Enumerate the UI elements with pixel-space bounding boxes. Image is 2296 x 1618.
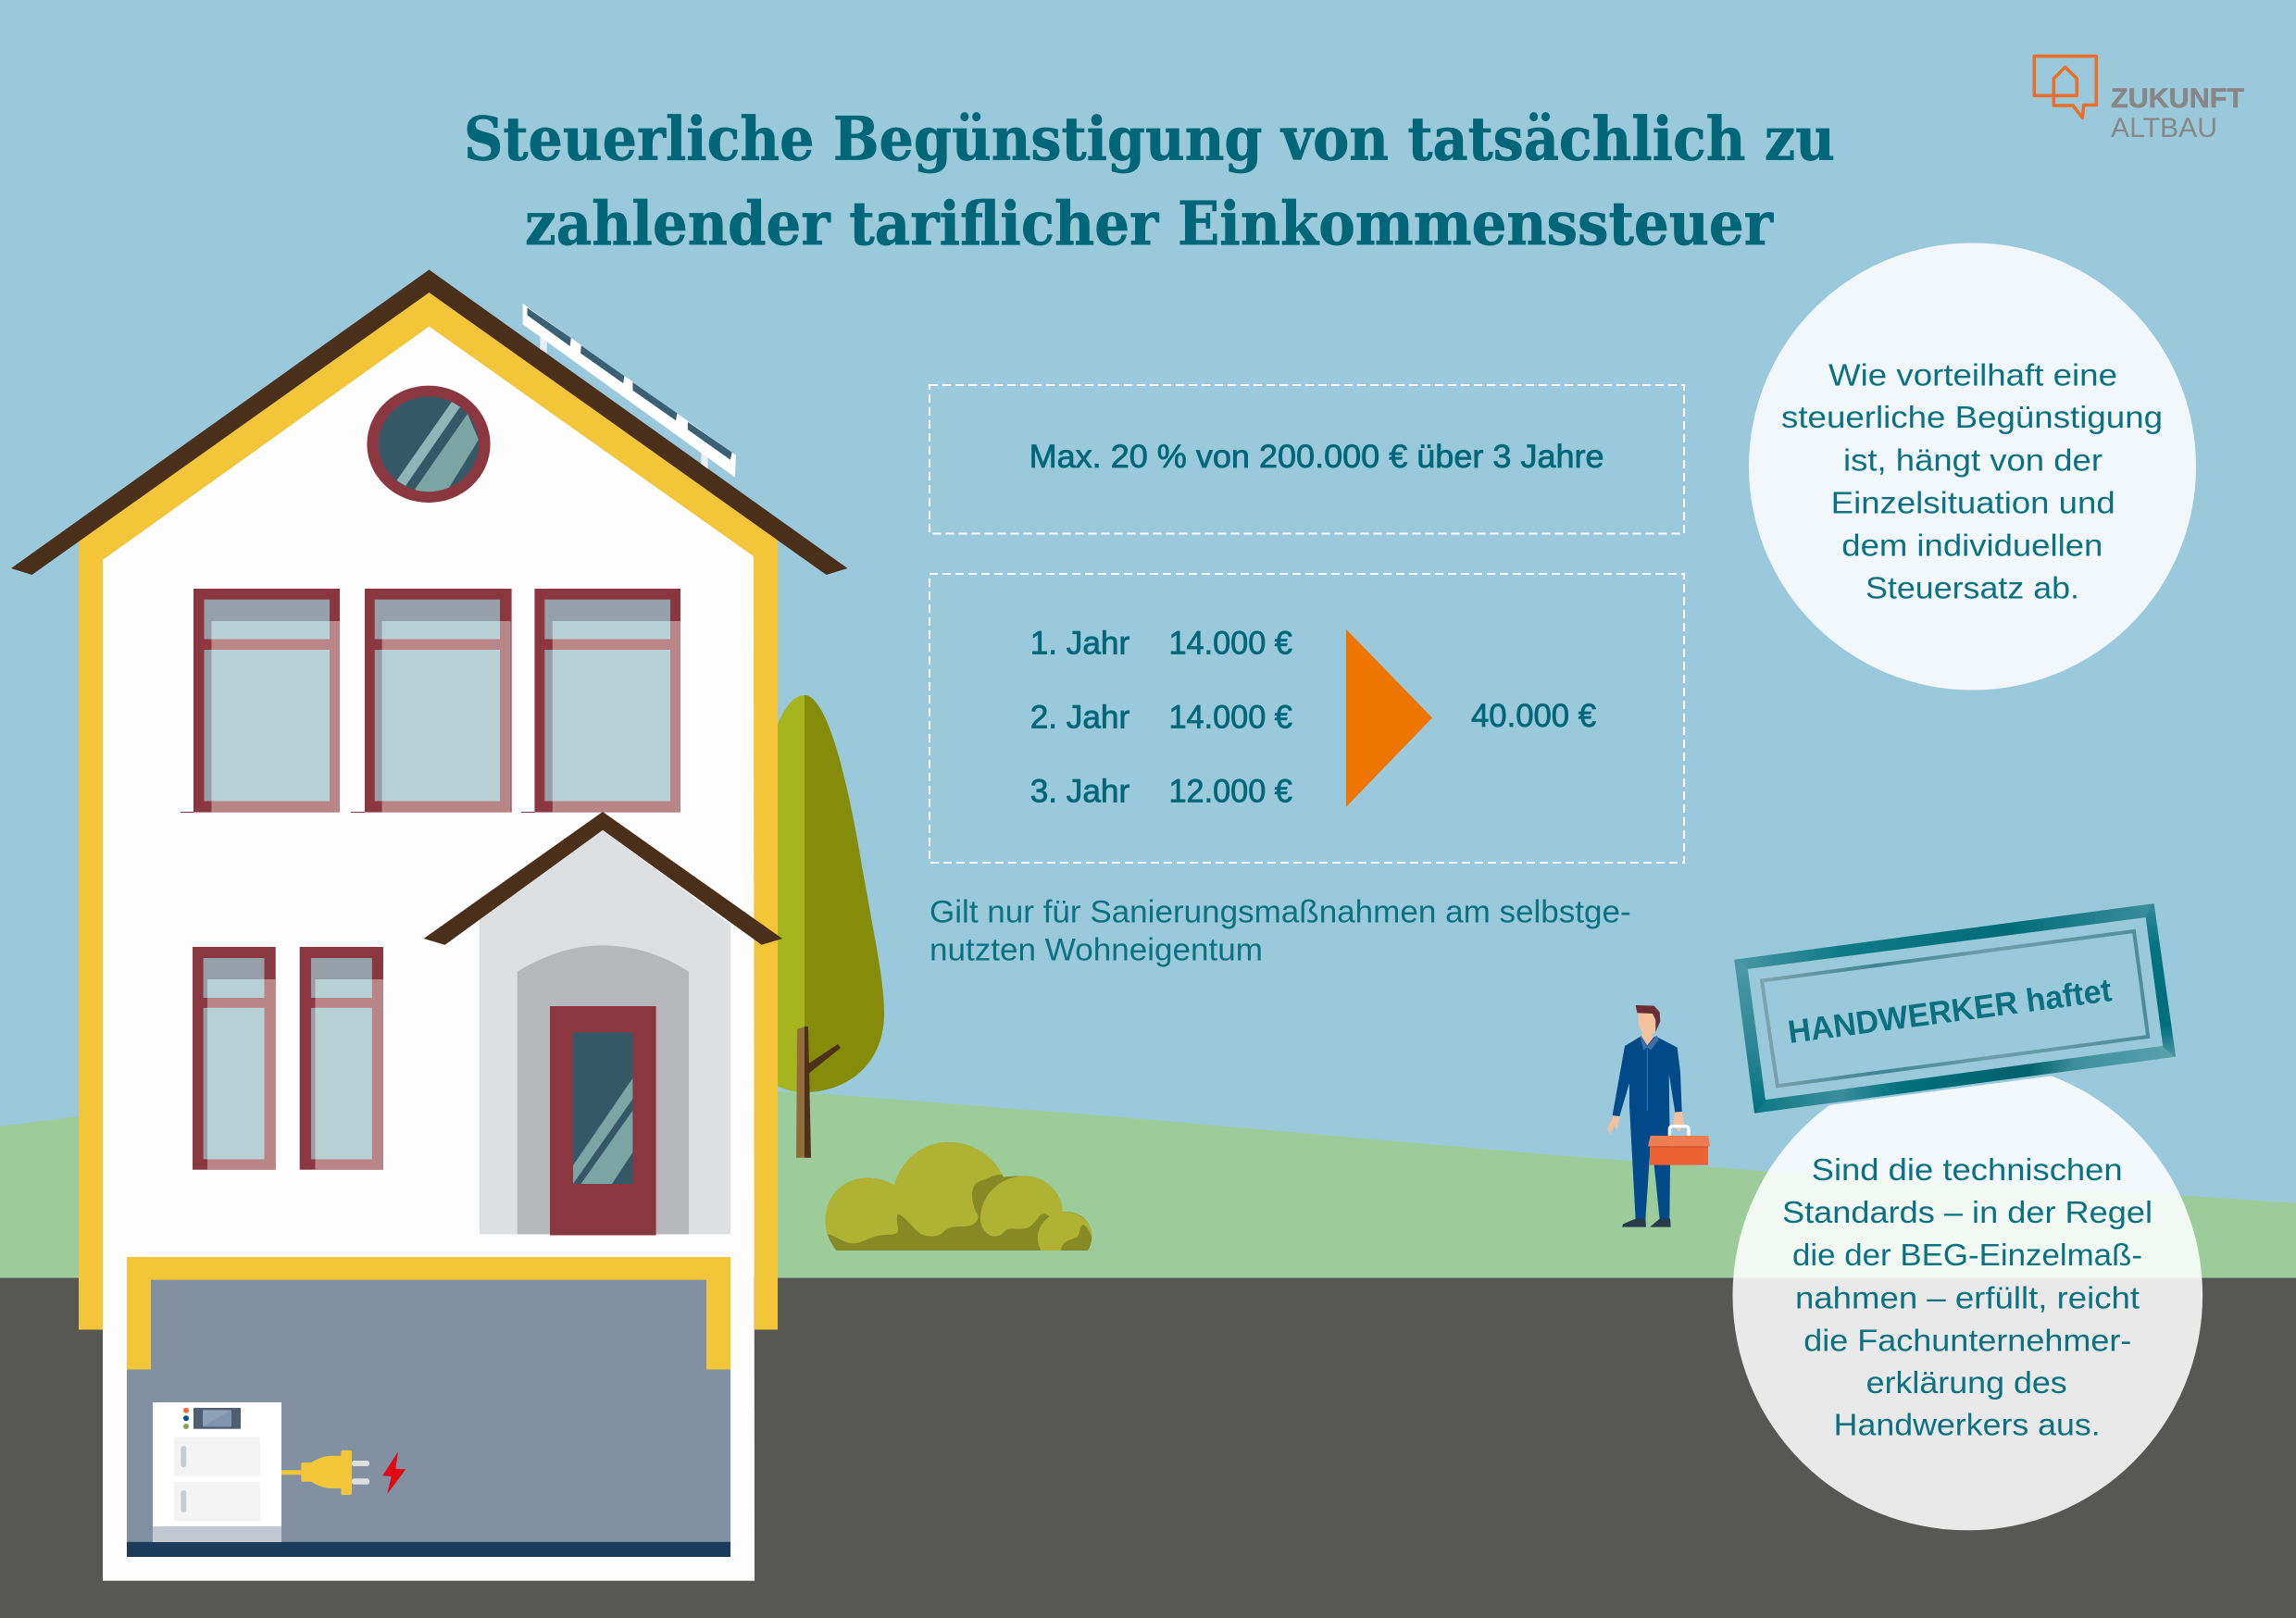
front door <box>550 1006 656 1235</box>
upper window 2 <box>351 589 512 813</box>
year 2 <box>1030 699 1292 735</box>
person body <box>1613 1037 1682 1219</box>
lower window left <box>193 947 276 1170</box>
logo Zukunft Altbau <box>2034 56 2244 143</box>
circle: contractor note: Standards – in der Regel <box>1782 1195 2152 1229</box>
box: maximum deduction: Max. 20 % von 200.000 € über 3 Jahre <box>1029 439 1604 475</box>
circle: contractor note <box>1733 1061 2202 1530</box>
box: yearly amounts <box>930 574 1684 863</box>
heating unit <box>153 1402 281 1542</box>
porch <box>424 812 782 1235</box>
toolbox <box>1648 1126 1710 1165</box>
circle: contractor note: die der BEG-Einzelmaß- <box>1792 1238 2142 1272</box>
note text: Gilt nur für Sanierungsmaßnahmen am selbstge- <box>930 895 1631 930</box>
lightning bolt <box>382 1451 406 1494</box>
year 1: 14.000 € <box>1168 626 1292 662</box>
yellow wall <box>79 292 778 1329</box>
title <box>464 105 1835 259</box>
note text: nutzten Wohneigentum <box>930 933 1263 968</box>
orange arrow <box>1346 629 1432 807</box>
lower window right <box>300 947 383 1170</box>
circle: contractor note: nahmen – erfüllt, reicht <box>1795 1280 2140 1314</box>
year 3: 3. Jahr <box>1030 774 1130 810</box>
logo Zukunft Altbau: ALTBAU <box>2111 113 2217 143</box>
circle: tax note: dem individuellen <box>1841 528 2103 562</box>
circle: tax note: ist, hängt von der <box>1843 442 2103 477</box>
year 2: 14.000 € <box>1168 699 1292 735</box>
circle: tax note: Steuersatz ab. <box>1866 570 2079 604</box>
circle: contractor note: erklärung des <box>1866 1365 2067 1400</box>
box: maximum deduction <box>930 385 1684 533</box>
title: zahlender tariflicher Einkommenssteuer <box>525 189 1774 259</box>
stamp: Handwerker haftet <box>1735 904 2175 1113</box>
upper window 1 <box>181 589 340 813</box>
circle: contractor note: die Fachunternehmer- <box>1803 1323 2131 1357</box>
ground <box>0 1277 2296 1618</box>
circle: contractor note: Handwerkers aus. <box>1834 1408 2101 1442</box>
circle: contractor note: Sind die technischen <box>1812 1152 2123 1187</box>
year 1 <box>1030 626 1292 662</box>
circle: tax note: Wie vorteilhaft eine <box>1828 358 2117 392</box>
porch roof <box>424 812 782 945</box>
title: Steuerliche Begünstigung von tatsächlich zu <box>464 105 1835 175</box>
house <box>11 269 848 1581</box>
house white facade <box>103 327 755 1581</box>
plug <box>281 1450 369 1495</box>
note text <box>930 895 1631 968</box>
logo Zukunft Altbau: ZUKUNFT <box>2111 83 2244 114</box>
upper window 3 <box>521 589 680 813</box>
basement <box>127 1257 730 1557</box>
tree <box>776 695 884 1158</box>
year 1: 1. Jahr <box>1030 626 1130 662</box>
circle: tax note <box>1749 243 2196 691</box>
year 2: 2. Jahr <box>1030 699 1130 735</box>
round attic window <box>367 386 491 503</box>
brown roof <box>11 269 848 575</box>
total: 40.000 € <box>1471 698 1596 734</box>
person with toolbox <box>1607 1005 1710 1227</box>
year 3 <box>1030 774 1292 810</box>
stamp: Handwerker haftet: HANDWERKER haftet <box>1786 972 2114 1051</box>
green hill <box>0 1083 2296 1278</box>
year 3: 12.000 € <box>1168 774 1292 810</box>
solar panels <box>523 304 736 478</box>
circle: tax note: Einzelsituation und <box>1831 485 2115 519</box>
bush <box>826 1142 1092 1251</box>
circle: tax note: steuerliche Begünstigung <box>1781 400 2163 434</box>
